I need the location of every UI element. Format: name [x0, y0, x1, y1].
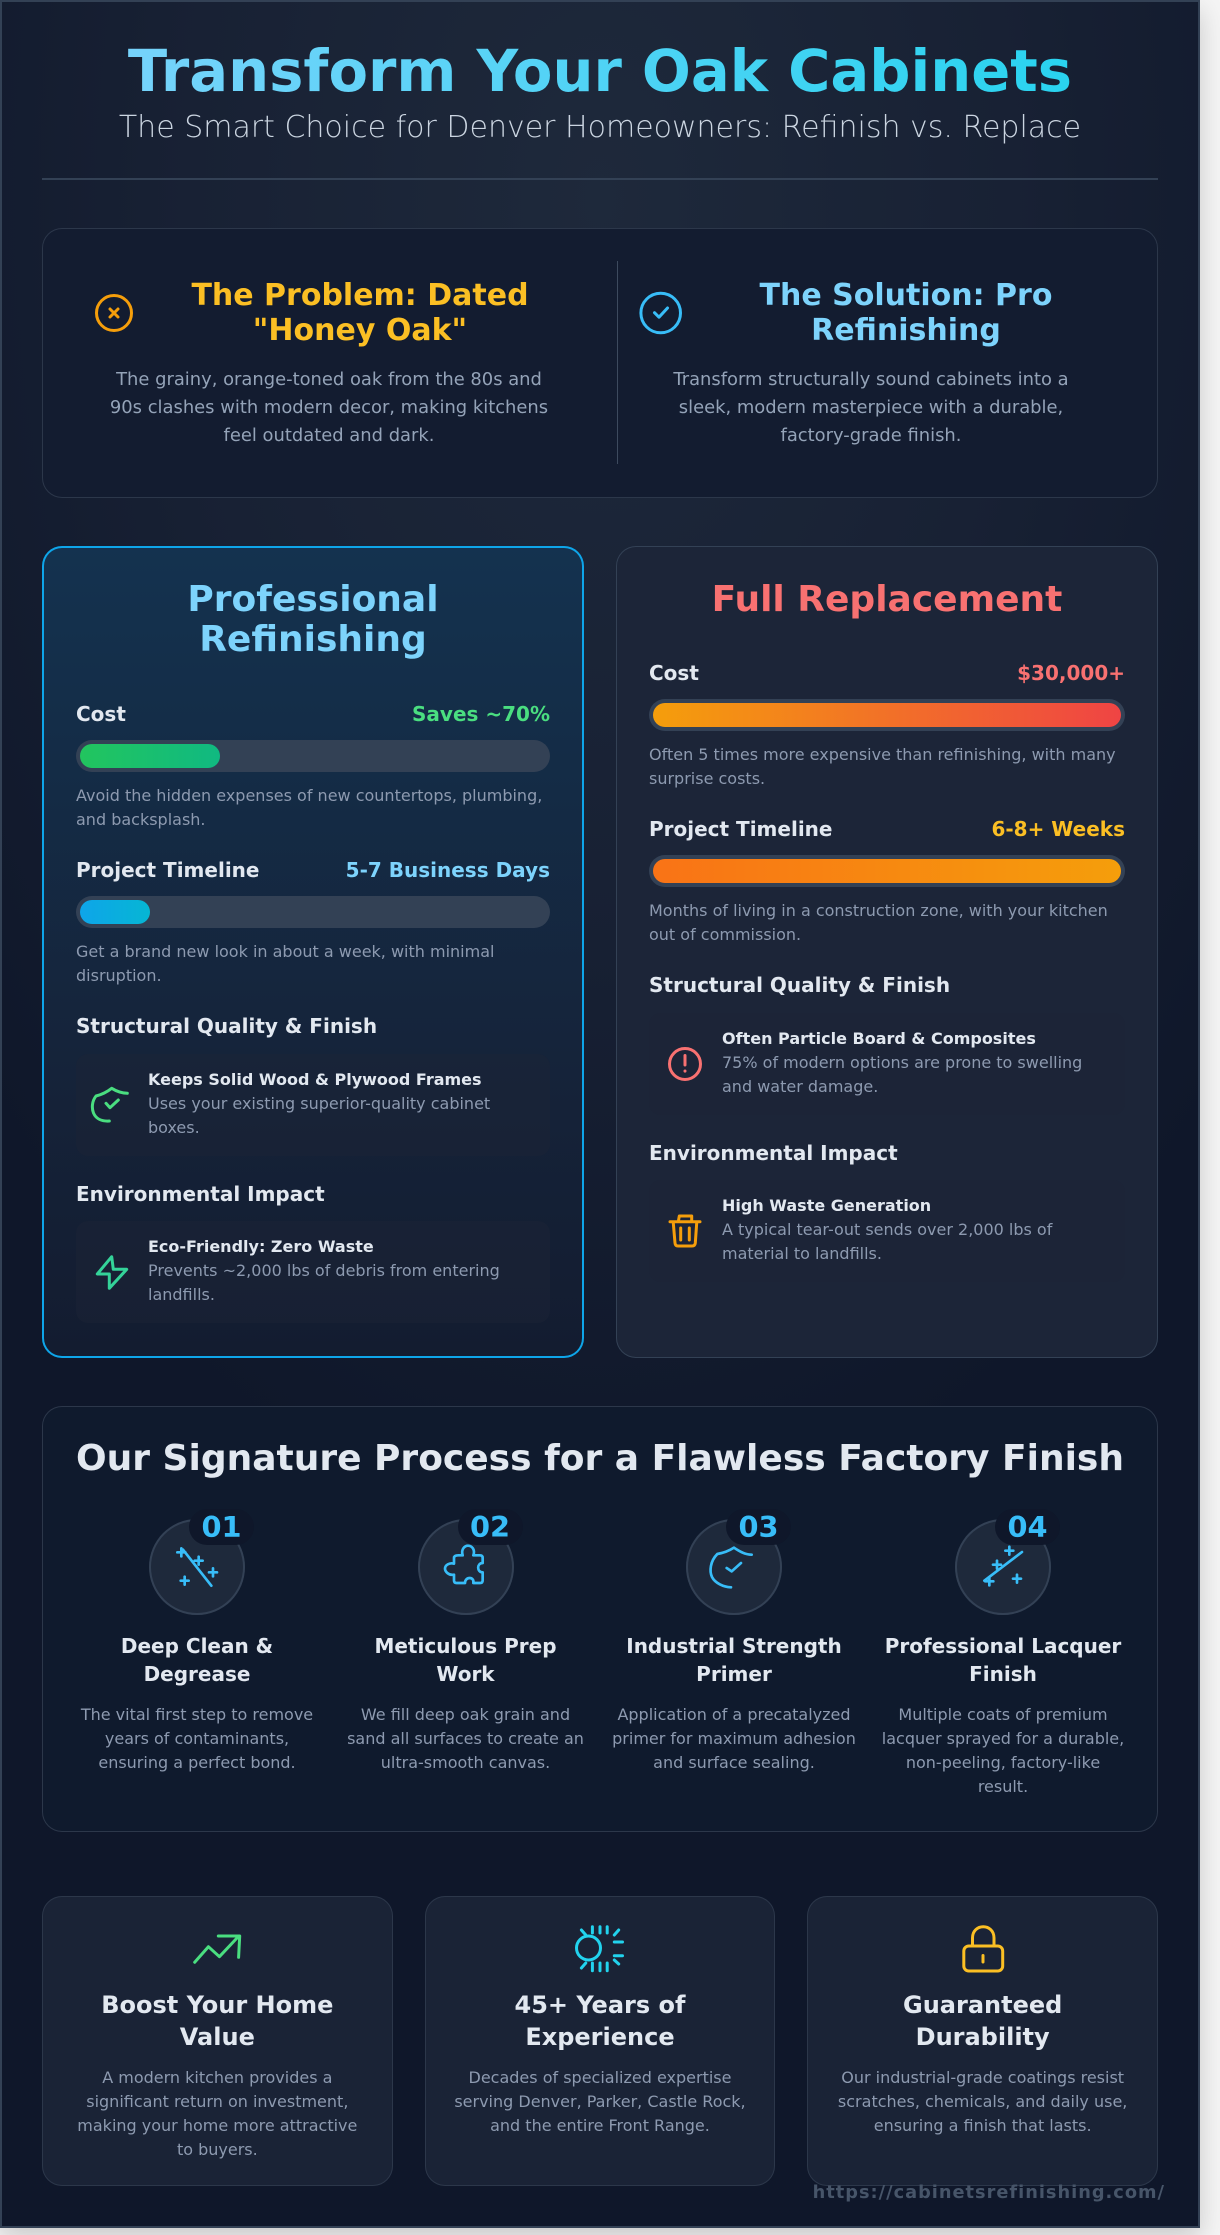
step text — [347, 1705, 584, 1772]
environment text: Prevents ~2,000 lbs of debris from entering — [148, 1261, 500, 1280]
card text — [454, 2068, 746, 2134]
step title — [885, 1634, 1122, 1686]
solution text: sleek, modern masterpiece with a durable, — [679, 397, 1063, 418]
panel heading: Refinishing — [199, 619, 427, 660]
quality label: Structural Quality & Finish — [76, 1014, 377, 1038]
timeline value: 5-7 Business Days — [346, 858, 550, 882]
cost note: and backsplash. — [76, 810, 206, 829]
icon: alert circle — [668, 1047, 702, 1081]
step text: primer for maximum adhesion — [612, 1729, 856, 1748]
step text: The vital first step to remove — [81, 1705, 313, 1724]
timeline bar — [649, 855, 1125, 887]
timeline note: disruption. — [76, 966, 162, 985]
icon: sun — [575, 1925, 624, 1972]
icon: lightning — [96, 1255, 128, 1290]
quality text: Often Particle Board & Composites — [722, 1029, 1036, 1048]
problem text: The grainy, orange-toned oak from the 80s and — [116, 369, 542, 390]
step number: 03 — [738, 1510, 779, 1544]
step text: non-peeling, factory-like — [906, 1753, 1100, 1772]
cost note: Avoid the hidden expenses of new countertops, plumbing, — [76, 786, 542, 805]
card title — [101, 1991, 333, 2051]
step text: and surface sealing. — [653, 1753, 815, 1772]
environment box — [76, 1221, 550, 1323]
step number — [458, 1509, 522, 1545]
step text: ensuring a perfect bond. — [98, 1753, 296, 1772]
card title: Experience — [525, 2023, 675, 2051]
card title — [903, 1991, 1062, 2051]
quality text: Uses your existing superior-quality cabinet — [148, 1094, 490, 1113]
quality text: 75% of modern options are prone to swelling — [722, 1053, 1082, 1072]
icon: shield in circle — [686, 1519, 782, 1615]
timeline note — [76, 942, 494, 985]
problem text: feel outdated and dark. — [224, 425, 434, 446]
step title — [626, 1634, 842, 1686]
panel: problem and solution — [42, 228, 1158, 498]
step number — [726, 1509, 791, 1545]
environment text: A typical tear-out sends over 2,000 lbs of — [722, 1220, 1052, 1239]
panel: professional refinishing — [42, 546, 584, 1358]
step text: ultra-smooth canvas. — [381, 1753, 550, 1772]
card text: serving Denver, Parker, Castle Rock, — [454, 2092, 746, 2110]
environment box — [649, 1180, 1125, 1282]
environment text — [722, 1196, 1053, 1263]
step number — [189, 1509, 254, 1545]
card: home value — [42, 1896, 393, 2186]
solution heading — [760, 278, 1052, 348]
step number: 01 — [201, 1510, 242, 1544]
step number: 04 — [1007, 1510, 1048, 1544]
step 1 — [80, 1510, 313, 1772]
icon: lock — [962, 1925, 1004, 1972]
card text — [77, 2068, 357, 2158]
solution text — [673, 369, 1069, 446]
environment label: Environmental Impact — [76, 1182, 325, 1206]
step title: Degrease — [144, 1662, 250, 1686]
panel heading — [187, 579, 439, 660]
panel: full replacement — [616, 546, 1158, 1358]
card text: to buyers. — [177, 2140, 258, 2158]
timeline label: Project Timeline — [76, 858, 259, 882]
header — [42, 38, 1158, 180]
cost value: $30,000+ — [1017, 660, 1125, 684]
timeline note: out of commission. — [649, 925, 801, 944]
quality text — [148, 1070, 490, 1137]
solution text: Transform structurally sound cabinets into a — [673, 369, 1069, 390]
step 2 — [347, 1510, 584, 1772]
quality label: Structural Quality & Finish — [649, 973, 950, 997]
cost label: Cost — [76, 702, 126, 726]
cost note: Often 5 times more expensive than refinishing, with many — [649, 744, 1116, 764]
step text — [612, 1705, 856, 1772]
environment text — [148, 1237, 500, 1304]
cost label: Cost — [649, 660, 699, 684]
quality text — [722, 1029, 1082, 1096]
card text: significant return on investment, — [86, 2092, 348, 2110]
step text: lacquer sprayed for a durable, — [882, 1729, 1124, 1748]
problem heading: The Problem: Dated — [191, 278, 529, 312]
environment text: landfills. — [148, 1285, 215, 1304]
timeline note: Get a brand new look in about a week, with minimal — [76, 942, 494, 961]
step text: We fill deep oak grain and — [361, 1705, 570, 1724]
title: Transform Your Oak Cabinets — [128, 38, 1072, 105]
solution heading: The Solution: Pro — [760, 278, 1052, 312]
step text — [80, 1705, 313, 1772]
cost note — [649, 744, 1116, 788]
process heading: Our Signature Process for a Flawless Factory Finish — [76, 1438, 1124, 1479]
step 3 — [612, 1510, 856, 1772]
environment text: Eco-Friendly: Zero Waste — [148, 1237, 374, 1256]
card title: Value — [180, 2023, 255, 2051]
problem text: 90s clashes with modern decor, making kitchens — [110, 397, 548, 418]
cost value: Saves ~70% — [412, 702, 550, 726]
card title: Guaranteed — [903, 1991, 1062, 2019]
step text: sand all surfaces to create an — [347, 1729, 584, 1748]
card title — [515, 1991, 686, 2051]
environment label: Environmental Impact — [649, 1141, 898, 1165]
icon: wand in circle — [149, 1519, 245, 1615]
panel heading: Full Replacement — [712, 579, 1062, 620]
step text: result. — [978, 1777, 1028, 1796]
icon: trash — [668, 1214, 702, 1248]
card text — [807, 2066, 1158, 2138]
step title: Finish — [969, 1662, 1037, 1686]
quality text: Keeps Solid Wood & Plywood Frames — [148, 1070, 482, 1089]
timeline note: Months of living in a construction zone, with your kitchen — [649, 901, 1108, 920]
step text: years of contaminants, — [105, 1729, 289, 1748]
step number — [995, 1509, 1060, 1545]
card text: ensuring a finish that lasts. — [874, 2116, 1092, 2134]
icon: solution check circle — [639, 292, 682, 334]
card title: 45+ Years of — [515, 1991, 685, 2019]
icon: trend up — [193, 1934, 242, 1964]
panel heading: Professional — [187, 579, 439, 620]
card text: Decades of specialized expertise — [468, 2068, 731, 2086]
icon: shield check — [90, 1086, 129, 1123]
step number: 02 — [470, 1510, 510, 1544]
quality text: and water damage. — [722, 1077, 878, 1096]
timeline label: Project Timeline — [649, 817, 832, 841]
step title: Professional Lacquer — [885, 1634, 1121, 1658]
card text: Our industrial-grade coatings resist — [841, 2068, 1124, 2086]
step text — [882, 1705, 1124, 1796]
quality box — [649, 1013, 1125, 1115]
card text: scratches, chemicals, and daily use, — [838, 2092, 1127, 2110]
timeline bar — [76, 896, 550, 928]
step 4 — [882, 1510, 1124, 1796]
solution text: factory-grade finish. — [781, 425, 961, 446]
step title — [374, 1634, 557, 1686]
subtitle: The Smart Choice for Denver Homeowners: Refinish vs. Replace — [119, 110, 1081, 145]
step title: Meticulous Prep — [374, 1634, 557, 1658]
cost bar — [76, 740, 550, 772]
card: experience — [425, 1896, 775, 2186]
icon: puzzle in circle — [418, 1519, 514, 1615]
step title: Work — [436, 1662, 495, 1686]
environment text: High Waste Generation — [722, 1196, 931, 1215]
icon: problem x circle — [95, 294, 133, 332]
step title: Industrial Strength — [626, 1634, 842, 1658]
card: durability — [807, 1896, 1158, 2186]
step text: Application of a precatalyzed — [617, 1705, 851, 1724]
panel: signature process — [42, 1406, 1158, 1832]
problem text — [110, 369, 548, 446]
quality text: boxes. — [148, 1118, 200, 1137]
timeline note — [649, 901, 1108, 944]
step title: Primer — [696, 1662, 772, 1686]
problem heading — [191, 278, 529, 348]
timeline value: 6-8+ Weeks — [991, 817, 1125, 841]
solution heading: Refinishing — [811, 312, 1001, 348]
step text: Multiple coats of premium — [898, 1705, 1108, 1724]
quality box — [76, 1054, 550, 1156]
problem heading: "Honey Oak" — [253, 312, 467, 348]
cost note — [76, 786, 542, 829]
card text: making your home more attractive — [77, 2116, 357, 2134]
environment text: material to landfills. — [722, 1244, 882, 1263]
card title: Durability — [916, 2023, 1050, 2051]
icon: wand in circle — [955, 1519, 1051, 1615]
card text: and the entire Front Range. — [490, 2116, 710, 2134]
step title: Deep Clean & — [121, 1634, 273, 1658]
card text: A modern kitchen provides a — [102, 2068, 332, 2086]
step title — [121, 1634, 273, 1686]
card title: Boost Your Home — [101, 1991, 333, 2019]
cost note: surprise costs. — [649, 768, 765, 788]
cost bar — [649, 699, 1125, 731]
footer url: https://cabinetsrefinishing.com/ — [813, 2182, 1165, 2202]
